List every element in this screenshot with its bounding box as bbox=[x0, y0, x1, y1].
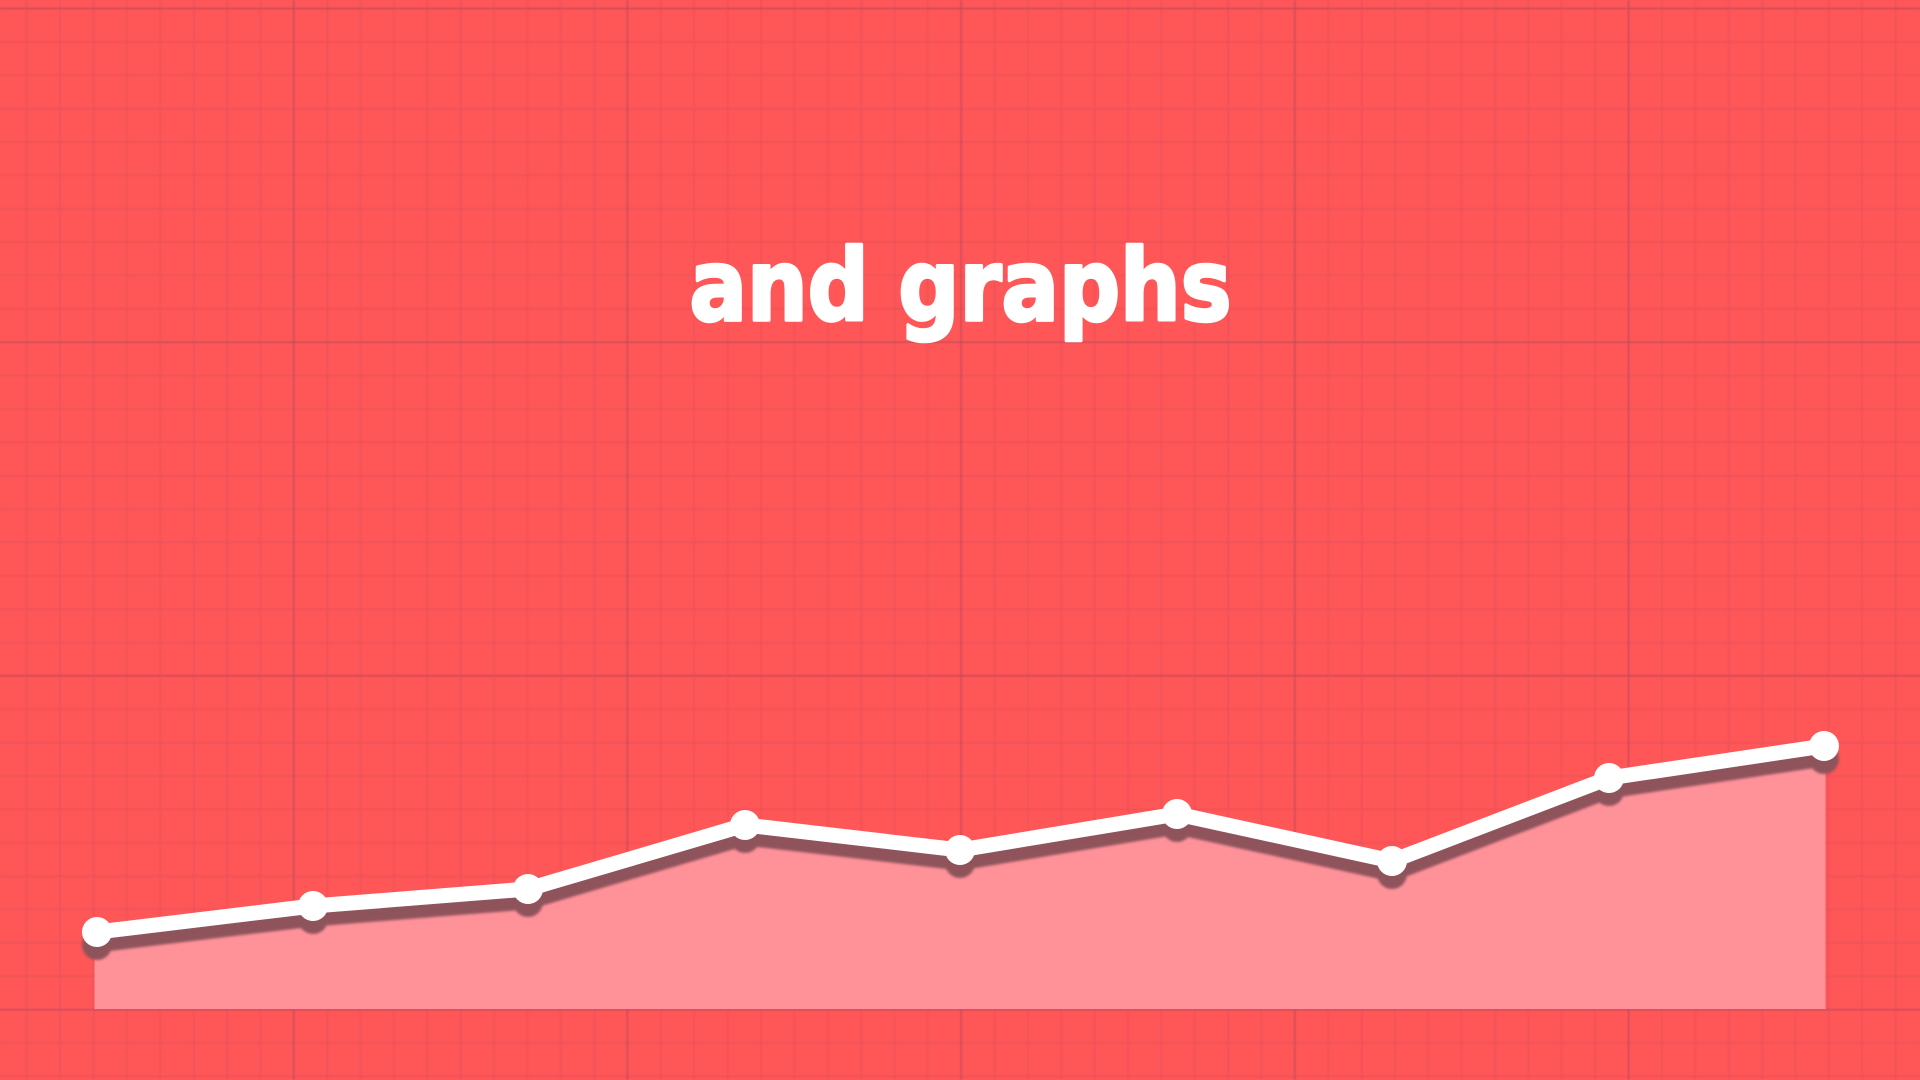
area line chart bbox=[82, 731, 1839, 1009]
chart area fill bbox=[94, 746, 1826, 1009]
white data line bbox=[97, 746, 1824, 932]
title: and graphs: and graphs bbox=[690, 229, 1232, 344]
data point markers bbox=[82, 731, 1839, 947]
line and marker shadow bbox=[82, 744, 1839, 960]
